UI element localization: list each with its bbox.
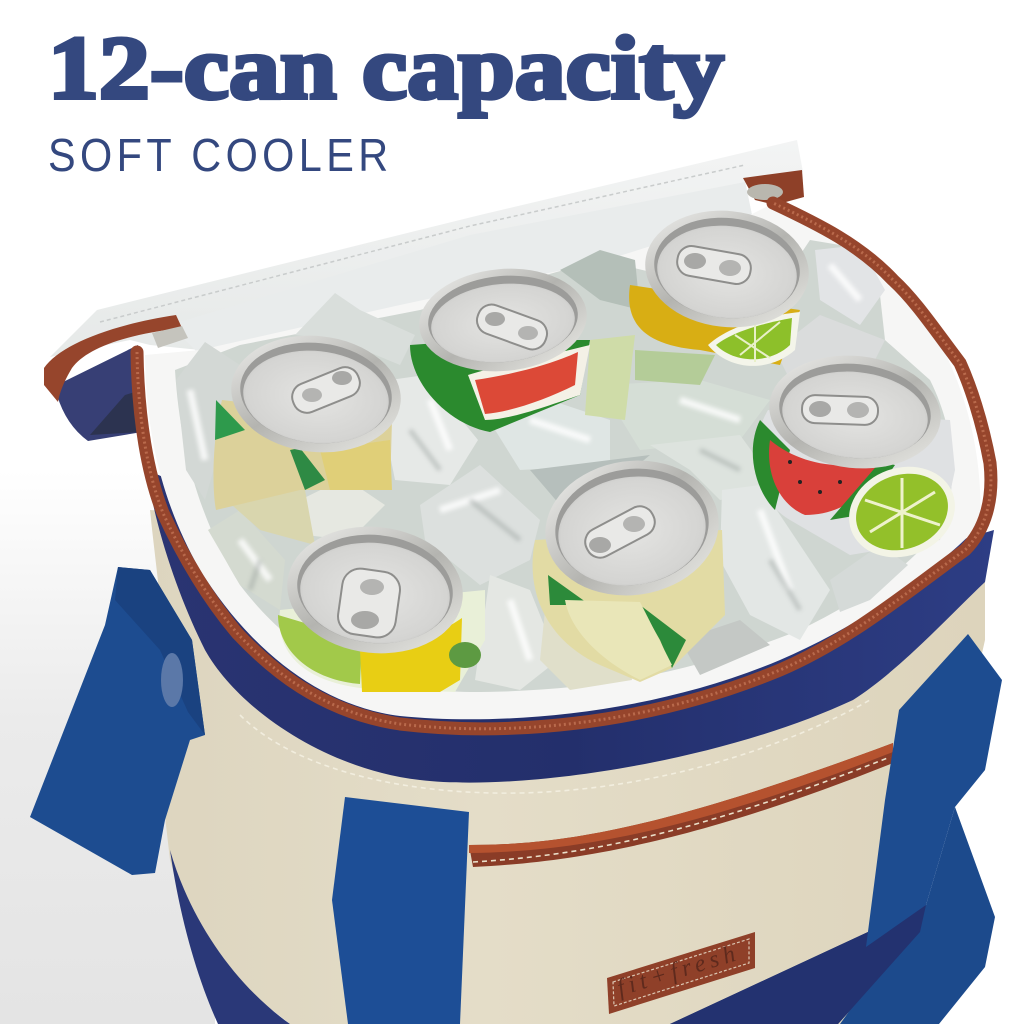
ice cubes	[176, 245, 908, 690]
zipper rim	[137, 203, 991, 729]
can: left, lemon	[214, 327, 407, 510]
lower navy trim left	[170, 850, 290, 1024]
can: top-centre, watermelon	[410, 262, 591, 432]
open lid	[44, 140, 804, 441]
interior ice bed	[175, 240, 952, 692]
lid inner panel	[170, 182, 752, 355]
can: right, watermelon and lime	[753, 347, 968, 572]
canvas stitching	[240, 700, 870, 793]
lid left brown trim	[44, 315, 182, 402]
navy rim band	[147, 470, 994, 783]
leather brand label	[607, 932, 755, 1014]
handle: front centre strap	[332, 797, 469, 1024]
handle: left side tab	[30, 567, 205, 875]
ice shadows	[250, 430, 800, 610]
ice highlights	[190, 265, 860, 660]
lid flap	[50, 140, 803, 357]
subtitle: SOFT COOLER	[48, 130, 388, 182]
title: 12-can capacity	[48, 19, 724, 118]
handle: right strap	[670, 634, 1002, 1024]
pocket zipper trim	[469, 743, 893, 867]
can: front-left, lime and lemon	[278, 518, 485, 692]
cooler bag body	[147, 470, 994, 1024]
lid left navy flap	[57, 345, 142, 441]
zip pull left	[152, 326, 188, 348]
zip pull right	[747, 184, 783, 200]
lower navy trim right	[670, 905, 926, 1024]
can: centre, lemon	[533, 450, 727, 682]
floor shadow	[0, 470, 215, 1024]
can: top-right, lime	[629, 203, 815, 366]
leather brand label: fit+fresh	[614, 941, 738, 1002]
insulated interior lining	[145, 205, 980, 719]
cream canvas	[150, 510, 985, 1024]
lid right zip corner	[743, 170, 804, 205]
